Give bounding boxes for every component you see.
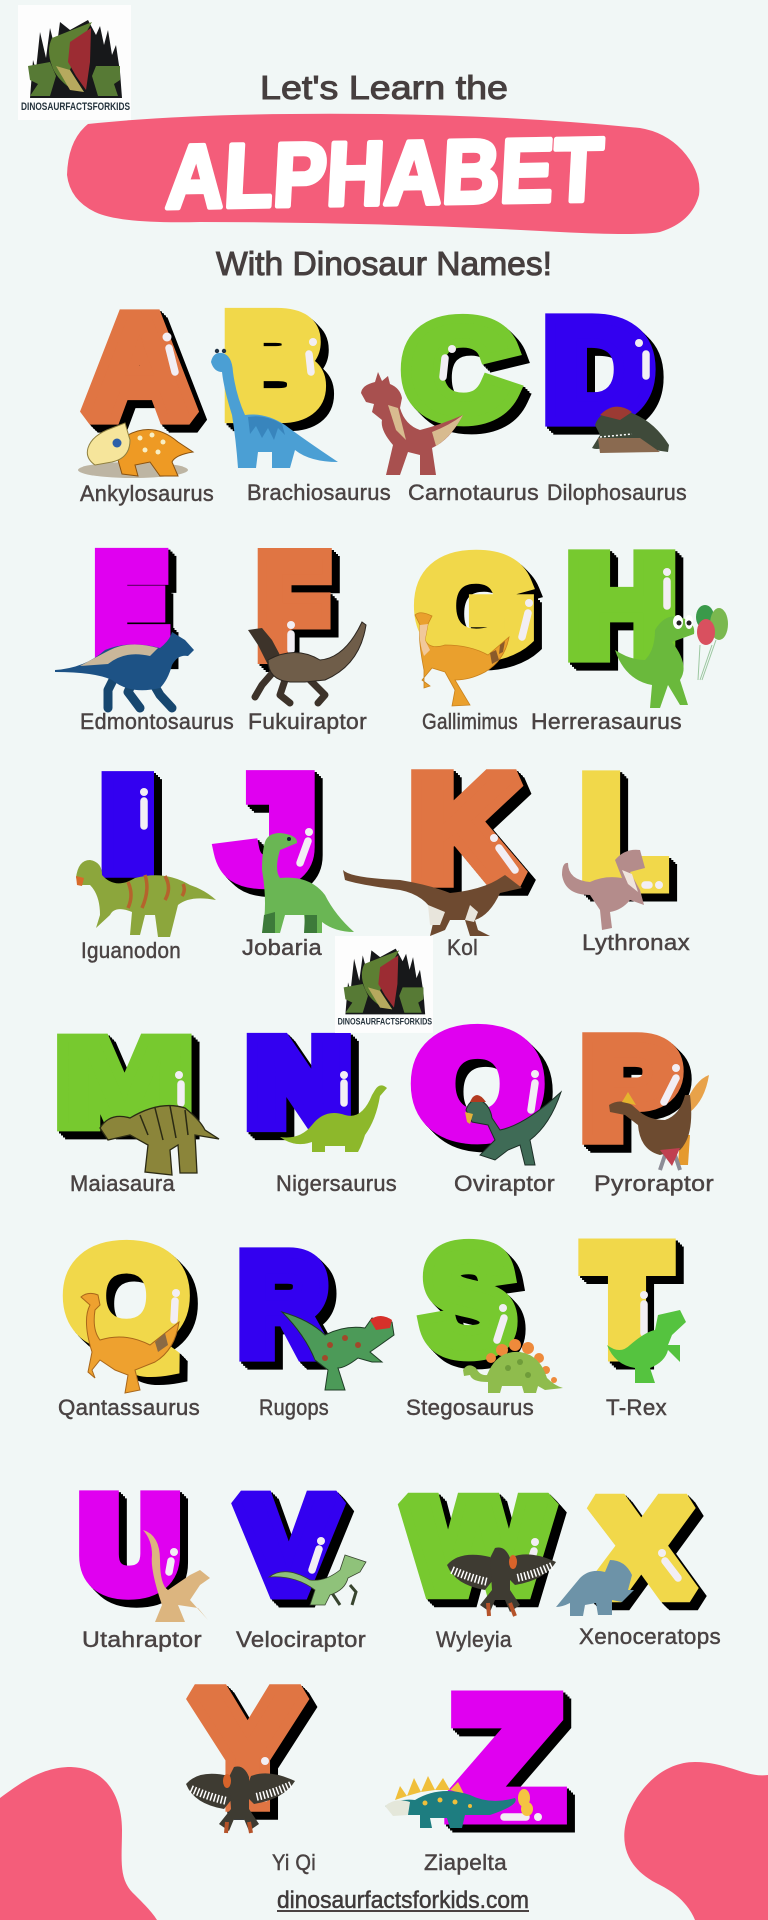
cell: R Rugops — [241, 1228, 394, 1420]
label Stegosaurus: Stegosaurus — [406, 1395, 534, 1420]
letter A: A — [86, 289, 193, 445]
cell: V Velociraptor — [236, 1473, 366, 1652]
highlight K — [490, 834, 515, 870]
cell: X Xenoceratops — [556, 1475, 721, 1649]
label Nigersaurus: Nigersaurus — [276, 1171, 397, 1196]
icon: dilophosaurus head — [592, 407, 669, 453]
cell: Y Yi Qi — [186, 1661, 316, 1875]
cell: Z Ziapelta — [385, 1665, 562, 1875]
highlight W — [528, 1538, 539, 1570]
letter T: T — [586, 1216, 668, 1383]
cell: C Carnotaurus — [361, 297, 539, 505]
cell: P Pyroraptor — [583, 1014, 714, 1196]
letter I: I — [100, 751, 156, 898]
letter M: M — [58, 1016, 191, 1148]
label Yi Qi: Yi Qi — [272, 1850, 316, 1875]
label Rugops: Rugops — [259, 1395, 329, 1420]
letter Y: Y — [192, 1661, 303, 1836]
cell: I Iguanodon — [76, 751, 216, 963]
icon: nigersaurus — [280, 1085, 387, 1152]
label Xenoceratops: Xenoceratops — [579, 1624, 721, 1649]
title text: ALPHABET — [164, 119, 605, 228]
highlight J — [300, 828, 313, 863]
label Herrerasaurus: Herrerasaurus — [531, 709, 682, 734]
label Lythronax: Lythronax — [582, 930, 690, 955]
label Maiasaura: Maiasaura — [70, 1171, 175, 1196]
highlight X — [658, 1549, 678, 1578]
label Iguanodon: Iguanodon — [81, 938, 181, 963]
letter Q: Q — [67, 1223, 186, 1370]
letter D: D — [546, 293, 651, 446]
cell: O Oviraptor — [415, 1004, 561, 1196]
highlight C — [443, 345, 456, 377]
letter J: J — [222, 749, 315, 910]
label Wyleyia: Wyleyia — [436, 1627, 512, 1652]
highlight S — [497, 1304, 507, 1340]
label Ziapelta: Ziapelta — [424, 1850, 507, 1875]
cell: W Wyleyia — [408, 1475, 556, 1652]
logo: top left: DINOSAURFACTSFORKIDS — [21, 101, 130, 113]
label Carnotaurus: Carnotaurus — [408, 480, 539, 505]
cell: K Kol — [343, 749, 522, 960]
label Utahraptor: Utahraptor — [82, 1627, 202, 1652]
highlight N — [340, 1071, 348, 1103]
cell: D Dilophosaurus — [546, 293, 687, 505]
highlight G — [522, 599, 533, 637]
highlight D — [635, 339, 646, 376]
label Ankylosaurus: Ankylosaurus — [80, 481, 214, 506]
label Velociraptor: Velociraptor — [236, 1627, 366, 1652]
letter C: C — [405, 297, 514, 445]
cell: J Jobaria — [222, 749, 354, 960]
highlight M — [175, 1071, 183, 1103]
icon: yi qi — [186, 1766, 295, 1833]
letter L: L — [583, 749, 664, 915]
highlight T — [640, 1291, 648, 1333]
letter E: E — [97, 531, 166, 679]
icon: ankylosaurus — [78, 423, 193, 478]
icon: pyroraptor — [609, 1075, 709, 1170]
icon: rugops — [282, 1312, 394, 1390]
label Brachiosaurus: Brachiosaurus — [247, 480, 391, 505]
highlight A — [162, 332, 175, 372]
letter H: H — [569, 531, 675, 683]
highlight Q — [172, 1289, 180, 1320]
highlight L — [645, 881, 663, 889]
icon: carnotaurus — [361, 372, 463, 475]
icon: jobaria — [262, 833, 354, 933]
label Gallimimus: Gallimimus — [422, 709, 518, 734]
icon: utahraptor — [143, 1530, 210, 1622]
label Dilophosaurus: Dilophosaurus — [547, 480, 687, 505]
cell: T T-Rex — [586, 1216, 686, 1420]
icon: ziapelta — [385, 1776, 533, 1828]
highlight V — [312, 1537, 325, 1570]
icon: stegosaurus — [463, 1339, 563, 1393]
highlight U — [169, 1548, 178, 1572]
icon: t-rex — [607, 1310, 686, 1383]
letter U: U — [81, 1472, 178, 1616]
icon: oviraptor — [465, 1092, 561, 1165]
icon: herrerasaurus with balloons — [615, 605, 728, 708]
decorative blob: bottom left — [0, 1767, 157, 1920]
cell: L Lythronax — [562, 749, 690, 955]
label Jobaria: Jobaria — [242, 935, 322, 960]
letter K: K — [411, 749, 521, 909]
letter V: V — [240, 1473, 337, 1618]
icon: wyleyia — [447, 1547, 556, 1616]
logo: center: DINOSAURFACTSFORKIDS — [338, 1016, 432, 1026]
letter G: G — [418, 532, 533, 680]
logo: center — [335, 936, 433, 1033]
icon: gallimimus — [415, 613, 509, 706]
letter X: X — [591, 1475, 691, 1621]
subheading: With Dinosaur Names! — [216, 245, 552, 282]
letter P: P — [583, 1014, 678, 1164]
highlight Z — [504, 1813, 542, 1821]
label Qantassaurus: Qantassaurus — [58, 1395, 200, 1420]
letter B: B — [226, 288, 322, 442]
cell: Q Qantassaurus — [58, 1223, 200, 1420]
cell: G Gallimimus — [415, 532, 533, 734]
icon: brachiosaurus — [211, 349, 338, 468]
icon: xenoceratops — [556, 1560, 634, 1616]
logo: top left — [18, 5, 131, 120]
letter N: N — [248, 1018, 349, 1148]
icon: fukuiraptor — [248, 622, 366, 703]
cell: S Stegosaurus — [406, 1221, 563, 1420]
highlight F — [287, 621, 295, 650]
website link: dinosaurfactsforkids.com — [277, 1887, 529, 1914]
letter R: R — [241, 1228, 326, 1380]
cell: B Brachiosaurus — [211, 288, 391, 505]
letter F: F — [259, 530, 327, 683]
cell: U Utahraptor — [81, 1472, 210, 1652]
letter S: S — [424, 1221, 513, 1381]
icon: iguanodon — [76, 860, 216, 937]
icon: velociraptor — [269, 1555, 366, 1605]
letter Z: Z — [449, 1665, 562, 1851]
cell: E Edmontosaurus — [55, 531, 234, 734]
highlight O — [531, 1070, 539, 1110]
highlight B — [309, 338, 317, 372]
label Kol: Kol — [447, 935, 478, 960]
label Oviraptor: Oviraptor — [454, 1171, 555, 1196]
cell: A Ankylosaurus — [78, 289, 214, 506]
icon: qantassaurus — [81, 1293, 179, 1393]
highlight I — [140, 788, 148, 826]
highlight E — [158, 649, 166, 657]
label Pyroraptor: Pyroraptor — [594, 1171, 714, 1196]
highlight Y — [261, 1757, 269, 1798]
highlight P — [664, 1064, 680, 1102]
label T-Rex: T-Rex — [606, 1395, 667, 1420]
highlight H — [663, 568, 671, 606]
letter O: O — [415, 1004, 541, 1165]
cell: N Nigersaurus — [248, 1018, 397, 1196]
cell: H Herrerasaurus — [531, 531, 728, 734]
icon: maiasaura — [100, 1106, 219, 1175]
icon: kol — [343, 870, 522, 936]
cell: M Maiasaura — [58, 1016, 219, 1196]
title banner — [67, 114, 699, 234]
decorative blob: bottom right — [624, 1762, 768, 1920]
icon: edmontosaurus — [55, 632, 194, 708]
letter W: W — [408, 1475, 549, 1618]
icon: lythronax — [562, 850, 645, 930]
heading: Let's Learn the: Let's Learn the — [260, 69, 508, 106]
cell: F Fukuiraptor — [248, 530, 367, 734]
label Edmontosaurus: Edmontosaurus — [80, 709, 234, 734]
label Fukuiraptor: Fukuiraptor — [248, 709, 367, 734]
